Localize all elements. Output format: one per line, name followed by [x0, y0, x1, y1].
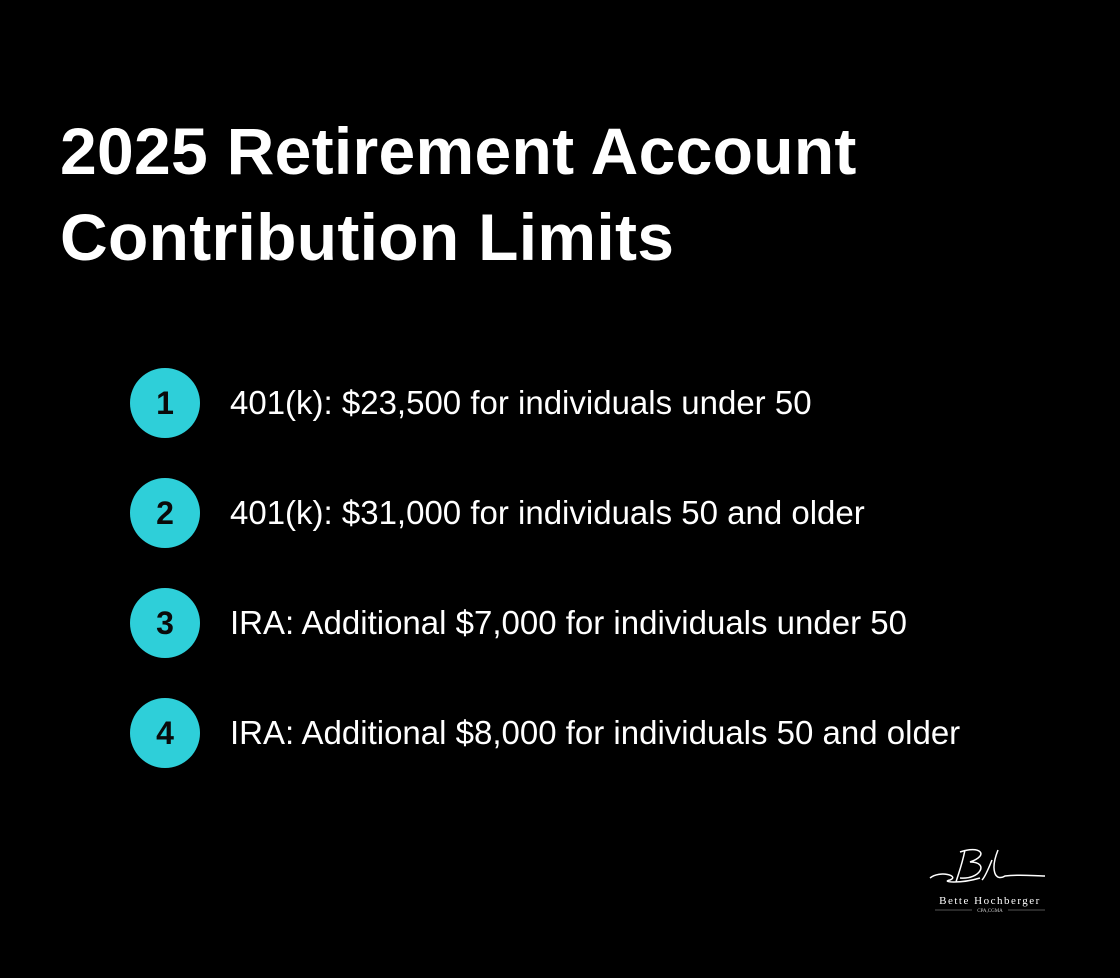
item 1: [130, 368, 812, 438]
logo: Bette Hochberger: [939, 895, 1041, 907]
badge 3: [130, 588, 200, 658]
text 3: IRA: Additional $7,000 for individuals under 50: [230, 604, 907, 641]
badge 4: [130, 698, 200, 768]
badge 1: 1: [156, 385, 174, 421]
item 3: [130, 588, 907, 658]
logo: [930, 848, 1045, 914]
badge 4: 4: [156, 715, 174, 751]
logo: CPA,CGMA: [977, 909, 1003, 914]
badge 2: 2: [156, 495, 174, 531]
text 1: 401(k): $23,500 for individuals under 50: [230, 384, 812, 421]
text 2: 401(k): $31,000 for individuals 50 and older: [230, 494, 865, 531]
item 2: [130, 478, 865, 548]
text 4: IRA: Additional $8,000 for individuals 50 and older: [230, 714, 960, 751]
title: [60, 114, 857, 274]
badge 3: 3: [156, 605, 174, 641]
badge 2: [130, 478, 200, 548]
badge 1: [130, 368, 200, 438]
item 4: [130, 698, 960, 768]
title: Contribution Limits: [60, 200, 674, 274]
title: 2025 Retirement Account: [60, 114, 857, 188]
